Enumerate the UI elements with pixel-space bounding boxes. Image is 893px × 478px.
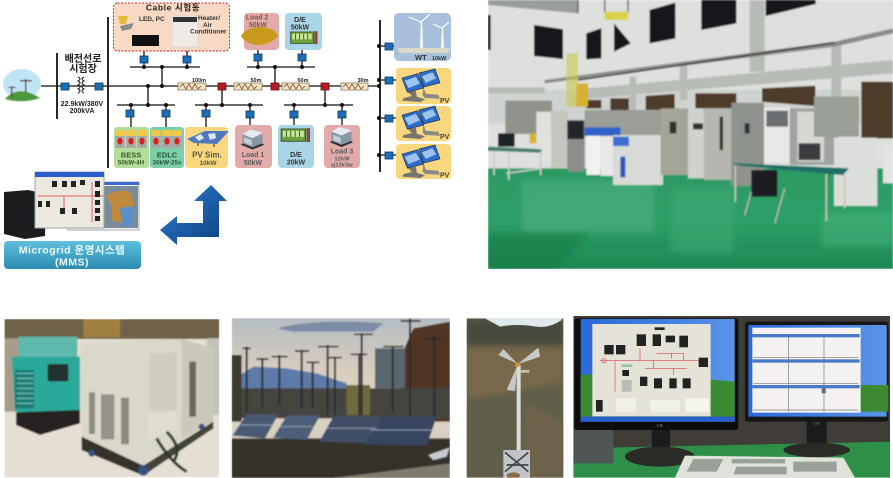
card: EDLC: EDLC [157, 150, 178, 160]
card: PV 1: PV [440, 98, 450, 105]
transformer and test site label: 200kVA [70, 108, 94, 115]
card: PV 3: PV [440, 172, 450, 180]
transformer and test site label: 배전선로 [65, 52, 101, 65]
card: D/E 20kW: D/E [290, 152, 302, 159]
card: BESS [114, 127, 149, 168]
card: EDLC: 30kW-25s [153, 160, 182, 166]
card: load 1 [235, 125, 272, 168]
panel: microgrid single-line diagram [3, 2, 451, 180]
card: BESS: 50kW-4H [118, 160, 145, 166]
power bus lines [41, 17, 396, 172]
card: D/E 50kW [285, 13, 322, 50]
card: wind turbine: 10kW [432, 56, 447, 62]
card: load 2: 50kW [249, 22, 268, 29]
photo: monitoring workstations [573, 316, 890, 478]
blue breakers [61, 43, 393, 159]
panel: cable test building: Cable 시험동 [146, 2, 200, 12]
card: BESS: BESS [121, 150, 141, 160]
arrow: diagram to MMS [160, 185, 227, 245]
panel: cable test building: LED, PC [139, 16, 165, 23]
panel: cable test building: Heater/ [198, 15, 220, 22]
card: PV 2: PV [440, 134, 450, 141]
card: PV simulator [185, 127, 229, 168]
card: wind turbine [394, 13, 451, 62]
transformer and test site label: 시험장 [69, 62, 97, 75]
panel: MMS operating system [4, 172, 141, 269]
card: load 2 [241, 13, 279, 50]
card: load 3: Load 3 [331, 148, 353, 156]
photo: microgrid test hall [488, 0, 893, 269]
card: PV 3 [396, 144, 451, 180]
photo: generators [4, 319, 219, 477]
icon: utility pole source [3, 69, 41, 101]
icon: PC tower [4, 190, 46, 239]
photo: monitoring workstations: LG [814, 421, 819, 425]
card: load 2: Load 2 [246, 14, 268, 22]
card: load 1: Load 1 [242, 152, 264, 159]
card: wind turbine: WT [415, 53, 427, 62]
photo: solar array and utility poles [232, 318, 450, 478]
card: load 3 [324, 125, 360, 168]
red switches [218, 83, 329, 90]
transformer and test site label [61, 52, 104, 115]
line impedances: 100m [192, 78, 206, 84]
line impedances: 50m [250, 78, 262, 84]
one-line diagram window [35, 172, 104, 228]
card: load 3: ±j12kVar [331, 162, 354, 168]
card: EDLC [150, 127, 184, 168]
MMS label button: (MMS) [55, 256, 89, 268]
panel: cable test building: Air [203, 22, 212, 29]
line impedances [178, 78, 369, 90]
MMS label button: Microgrid 운영시스템 [19, 244, 125, 256]
card: PV simulator: PV Sim. [192, 150, 222, 160]
photo: monitoring workstations: LG [657, 423, 663, 428]
card: load 3: 12kW [334, 156, 350, 162]
card: D/E 50kW: D/E [294, 17, 306, 24]
panel: cable test building [114, 2, 230, 51]
card: D/E 20kW: 20kW [287, 160, 306, 166]
card: D/E 50kW: 50kW [291, 24, 310, 32]
photo: small wind turbine [467, 318, 563, 478]
card: D/E 20kW [278, 125, 314, 168]
card: PV 2 [396, 106, 451, 141]
transformer and test site label: 22.9kW/380V [61, 101, 104, 108]
card: load 1: 50kW [244, 160, 263, 167]
line impedances: 50m [297, 78, 309, 84]
line impedances: 30m [357, 78, 369, 84]
card: PV 1 [396, 68, 451, 105]
panel: cable test building: Conditioner [190, 28, 227, 36]
junction dots [129, 44, 381, 157]
chart window [68, 182, 139, 230]
MMS label button [4, 241, 141, 269]
card: PV simulator: 10kW [200, 160, 217, 167]
